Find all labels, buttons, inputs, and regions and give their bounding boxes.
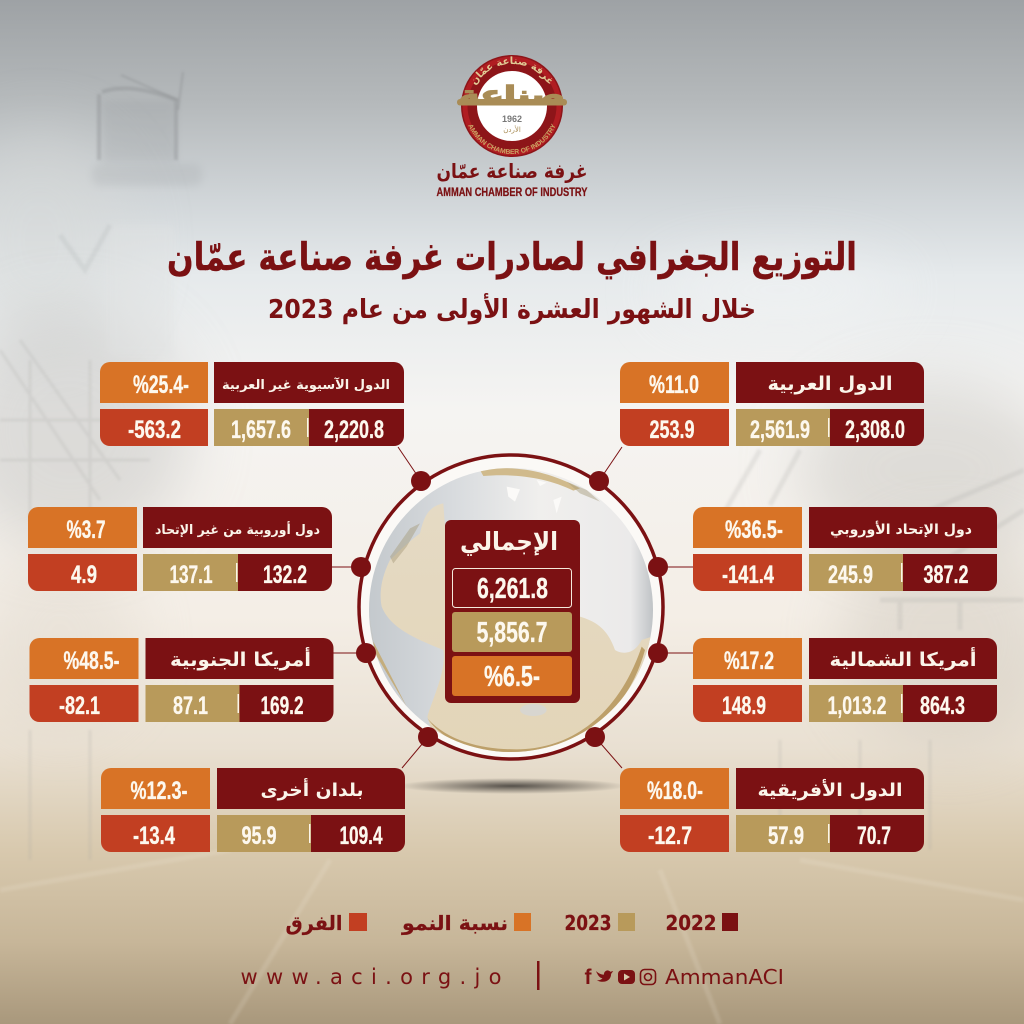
panel: Arab countries: 253.9 — [650, 416, 694, 444]
panel: Arab countries: %11.0 — [649, 371, 699, 399]
panel: African countries: -12.7 — [648, 822, 692, 850]
footer divider — [537, 961, 540, 990]
globe shadow — [397, 778, 627, 794]
social handle: AmmanACI — [665, 965, 784, 989]
panel: EU countries: دول الإتحاد الأوروبي — [830, 521, 972, 538]
logo: Amman Chamber of Industry: AMMAN CHAMBER OF INDUSTRY — [436, 187, 588, 199]
panel: EU countries: 387.2 — [924, 561, 968, 589]
social icons: f — [584, 966, 592, 989]
panel: EU countries: %36.5- — [725, 516, 783, 544]
panel: South America: 87.1 — [173, 692, 208, 720]
panel: non-Arab Asian countries: %25.4- — [133, 371, 189, 399]
logo: Amman Chamber of Industry: صناعة — [459, 81, 565, 109]
panel: EU countries: 245.9 — [828, 561, 873, 589]
panel: African countries — [620, 768, 924, 852]
logo: Amman Chamber of Industry: 1962 — [502, 114, 522, 124]
panel: non-EU European countries: دول أوروبية من غير الإتحاد — [155, 521, 320, 538]
panel: EU countries: -141.4 — [722, 561, 774, 589]
logo: Amman Chamber of Industry: غرفة صناعة عمّان — [473, 56, 552, 85]
logo: Amman Chamber of Industry: غرفة صناعة عمّان — [436, 159, 588, 183]
panel: North America: 1,013.2 — [828, 692, 886, 720]
panel: total: الإجمالي — [460, 527, 558, 556]
panel: African countries: %18.0- — [647, 777, 703, 805]
panel: South America: أمريكا الجنوبية — [170, 647, 311, 671]
panel: North America: 864.3 — [920, 692, 965, 720]
panel: South America — [30, 638, 334, 722]
logo: Amman Chamber of Industry: AMMAN CHAMBER OF INDUSTRY — [468, 124, 555, 154]
logo: Amman Chamber of Industry — [436, 55, 588, 199]
panel: non-EU European countries: %3.7 — [66, 516, 106, 544]
globe — [359, 455, 663, 759]
panel: North America — [693, 638, 997, 722]
panel: total: 6,261.8 — [477, 573, 548, 605]
panel: other countries — [101, 768, 405, 852]
panel: Arab countries: 2,308.0 — [845, 416, 905, 444]
panel: North America: أمريكا الشمالية — [830, 647, 976, 671]
panel: non-EU European countries: 4.9 — [71, 561, 97, 589]
panel: Arab countries — [620, 362, 924, 446]
panel: African countries: 57.9 — [768, 822, 804, 850]
panel: North America: 148.9 — [722, 692, 766, 720]
panel: non-Arab Asian countries — [100, 362, 404, 446]
panel: African countries: الدول الأفريقية — [758, 779, 902, 801]
panel: non-EU European countries — [28, 507, 332, 591]
subtitle: خلال الشهور العشرة الأولى من عام 2023 — [268, 293, 756, 325]
panel: other countries: 95.9 — [242, 822, 276, 850]
panel: South America: -82.1 — [59, 692, 100, 720]
panel: Arab countries: الدول العربية — [768, 373, 892, 395]
panel: non-Arab Asian countries: الدول الآسيوية غير العربية — [222, 377, 390, 393]
panel: EU countries — [693, 507, 997, 591]
panel: total: 5,856.7 — [476, 617, 548, 649]
legend: 2022 — [666, 911, 716, 935]
legend: 2023 — [564, 911, 612, 935]
panel: Arab countries: 2,561.9 — [750, 416, 810, 444]
title: التوزيع الجغرافي لصادرات غرفة صناعة عمّان — [167, 235, 857, 279]
connector lines — [331, 447, 693, 768]
panel: African countries: 70.7 — [857, 822, 891, 850]
panel: other countries: 109.4 — [340, 822, 383, 850]
website: www.aci.org.jo — [240, 965, 502, 989]
legend: نسبة النمو — [401, 911, 508, 935]
panel: other countries: %12.3- — [130, 777, 188, 805]
panel: South America: 169.2 — [260, 692, 304, 720]
panel: total: %6.5- — [484, 661, 540, 693]
panel: non-Arab Asian countries: 1,657.6 — [231, 416, 291, 444]
connector dots — [351, 471, 668, 747]
logo: Amman Chamber of Industry: الأردن — [503, 125, 521, 134]
panel: non-EU European countries: 137.1 — [170, 561, 213, 589]
legend — [286, 911, 738, 935]
panel: South America: %48.5- — [64, 647, 120, 675]
panel: other countries: -13.4 — [133, 822, 175, 850]
legend: الفرق — [286, 911, 342, 935]
social icons — [584, 966, 656, 989]
panel: non-EU European countries: 132.2 — [263, 561, 307, 589]
panel: non-Arab Asian countries: -563.2 — [128, 416, 181, 444]
panel: non-Arab Asian countries: 2,220.8 — [324, 416, 384, 444]
panel: other countries: بلدان أخرى — [260, 778, 364, 801]
panel: North America: %17.2 — [724, 647, 774, 675]
panel: total — [445, 520, 580, 703]
